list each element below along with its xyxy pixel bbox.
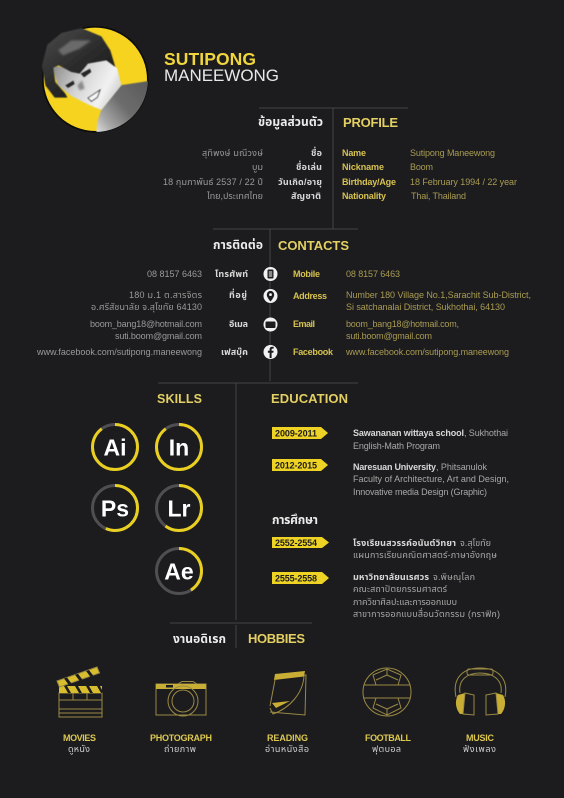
contact values: 08 8157 6463 (346, 269, 400, 279)
skill ring: Ps: Ps (101, 496, 129, 522)
school 2: Naresuan University (353, 462, 436, 472)
profile labels: Nationality (342, 191, 386, 201)
panel: hobbies (57, 631, 506, 755)
skill ring: Ae: Ae (164, 558, 194, 584)
Thai profile labels: วันเกิด/อายุ (278, 177, 322, 187)
Thai profile values: 18 กุมภาพันธ์ 2537 / 22 ปี (163, 177, 263, 187)
tag: 2555-2558: 2555-2558 (275, 574, 317, 584)
name: MANEEWONG (164, 66, 279, 85)
heading: skills: SKILLS (157, 392, 202, 406)
label: photograph: PHOTOGRAPH (150, 733, 212, 743)
contact labels (293, 269, 334, 357)
school 1: English-Math Program (353, 441, 440, 451)
tag: 2552-2554: 2552-2554 (275, 538, 317, 548)
Thai profile labels: ชื่อ (311, 146, 322, 158)
Thai profile values: ไทย,ประเทศไทย (206, 191, 263, 201)
school 1: , Sukhothai (464, 428, 508, 438)
label: football: ฟุตบอล (372, 744, 401, 754)
label: movies: ดูหนัง (68, 744, 90, 755)
panel: education (271, 391, 509, 619)
profile values: 18 February 1994 / 22 year (410, 177, 517, 187)
skill ring: Ai (92, 424, 138, 470)
label: photograph: ถ่ายภาพ (164, 744, 196, 754)
label: football (365, 733, 412, 754)
icon: headphones (455, 668, 506, 715)
Thai school 1 (353, 538, 497, 560)
skill ring: Ps (92, 486, 138, 530)
heading: Thai education: การศึกษา (272, 513, 318, 527)
heading: hobbies: HOBBIES (248, 631, 305, 646)
Thai contact values: www.facebook.com/sutipong.maneewong (36, 347, 202, 357)
profile values: Boom (410, 162, 433, 172)
skill ring: In: In (169, 434, 189, 460)
Thai school 1: โรงเรียนสวรรค์อนันต์วิทยา (353, 538, 456, 548)
Thai school 1: แผนการเรียนคณิตศาสตร์-ภาษาอังกฤษ (353, 550, 497, 560)
Thai contact labels: โทรศัพท์ (215, 269, 248, 279)
profile labels: Birthday/Age (342, 177, 396, 187)
Thai school 1: จ.สุโขทัย (460, 538, 491, 548)
icon: book (270, 671, 306, 715)
Thai school 2: สาขาการออกแบบสื่อนวัตกรรม (กราฟิก) (353, 607, 500, 619)
skill ring: In (156, 424, 202, 470)
Thai contact values (36, 269, 203, 357)
panel: skills (92, 392, 202, 594)
label: football: FOOTBALL (365, 733, 412, 743)
icon: location pin (264, 289, 278, 303)
contact labels: Facebook (293, 347, 334, 357)
profile labels: Nickname (342, 162, 384, 172)
school 2: , Phitsanulok (436, 462, 488, 472)
Thai contact values: 08 8157 6463 (147, 269, 202, 279)
Thai profile labels: สัญชาติ (291, 191, 321, 201)
school 2: Faculty of Architecture, Art and Design, (353, 474, 509, 484)
school 2: Innovative media Design (Graphic) (353, 487, 487, 497)
skill ring: Lr: Lr (168, 496, 191, 522)
Thai contact values: 180 ม.1 ต.สารจิตร (129, 290, 203, 300)
contact labels: Address (293, 291, 327, 301)
Thai contact values: boom_bang18@hotmail.com (90, 319, 202, 329)
contact labels: Email (293, 319, 315, 329)
Thai contact labels (215, 269, 248, 357)
name (164, 49, 279, 85)
tag: 2552-2554 (272, 537, 329, 548)
Thai profile labels: ชื่อเล่น (296, 160, 322, 172)
school 1: Sawananan wittaya school (353, 428, 464, 438)
heading: education: EDUCATION (271, 391, 348, 406)
contact labels: Mobile (293, 269, 320, 279)
label: movies: MOVIES (63, 733, 96, 743)
label: reading (265, 733, 309, 754)
heading: Thai contacts: การติดต่อ (213, 238, 263, 252)
contact values: www.facebook.com/sutipong.maneewong (345, 347, 509, 357)
label: music: MUSIC (466, 733, 494, 743)
label: photograph (150, 733, 212, 754)
Thai contact values: อ.ศรีสัชนาลัย จ.สุโขทัย 64130 (91, 302, 202, 312)
profile values: Thai, Thailand (411, 191, 466, 201)
Thai school 2: ภาควิชาศิลปะและการออกแบบ (353, 597, 457, 607)
profile photo (42, 26, 151, 134)
skill ring: Lr (156, 486, 202, 530)
icon: clapperboard (57, 667, 102, 717)
profile values (410, 148, 517, 201)
Thai school 2: คณะสถาปัตยกรรมศาสตร์ (353, 584, 448, 594)
profile labels (342, 148, 396, 201)
contact values: Si satchanalai District, Sukhothai, 64130 (346, 302, 505, 312)
icon: camera (156, 682, 206, 716)
label: reading: อ่านหนังสือ (265, 744, 309, 754)
school 1 (353, 428, 508, 451)
tag: 2012-2015 (272, 459, 328, 471)
heading: Thai hobbies: งานอดิเรก (173, 632, 226, 646)
icon: email (264, 318, 278, 332)
Thai school 2: จ.พิษณุโลก (433, 572, 475, 582)
heading: profile: PROFILE (343, 115, 398, 130)
panel: contacts (36, 238, 531, 359)
Thai school 2: มหาวิทยาลัยนเรศวร (353, 572, 429, 582)
label: movies (63, 733, 96, 755)
contact values: suti.boom@gmail.com (346, 331, 432, 341)
tag: 2009-2011 (272, 427, 328, 439)
school 2 (353, 462, 509, 497)
Thai profile values (163, 148, 263, 201)
contact values: boom_bang18@hotmail.com, (346, 319, 459, 329)
Thai contact values: suti.boom@gmail.com (115, 331, 202, 341)
skill ring: Ai: Ai (104, 434, 126, 460)
icon: facebook (264, 345, 278, 359)
Thai school 2 (353, 572, 500, 619)
tag: 2009-2011: 2009-2011 (275, 428, 317, 438)
Thai profile values: สุทิพงษ์ มณีวงษ์ (202, 148, 263, 158)
contact values: Number 180 Village No.1,Sarachit Sub-District, (346, 290, 531, 300)
profile labels: Name (342, 148, 366, 158)
tag: 2012-2015: 2012-2015 (275, 460, 317, 470)
Thai contact labels: ที่อยู่ (229, 288, 247, 300)
label: music: ฟังเพลง (463, 744, 496, 754)
Thai profile values: บูม (252, 162, 263, 173)
profile values: Sutipong Maneewong (410, 148, 495, 158)
contact values (345, 269, 531, 357)
Thai contact labels: เฟสบุ๊ค (221, 347, 248, 357)
skill ring: Ae (156, 548, 202, 594)
Thai profile labels (278, 146, 322, 201)
label: music (463, 733, 496, 754)
heading: contacts: CONTACTS (278, 238, 349, 253)
icon: football (363, 668, 411, 716)
tag: 2555-2558 (272, 572, 329, 584)
icon: phone (264, 267, 278, 281)
panel: profile (163, 115, 517, 201)
heading: Thai profile: ข้อมูลส่วนตัว (258, 115, 323, 130)
name: SUTIPONG (164, 49, 256, 69)
Thai contact labels: อีเมล (229, 319, 248, 329)
label: reading: READING (267, 733, 308, 743)
